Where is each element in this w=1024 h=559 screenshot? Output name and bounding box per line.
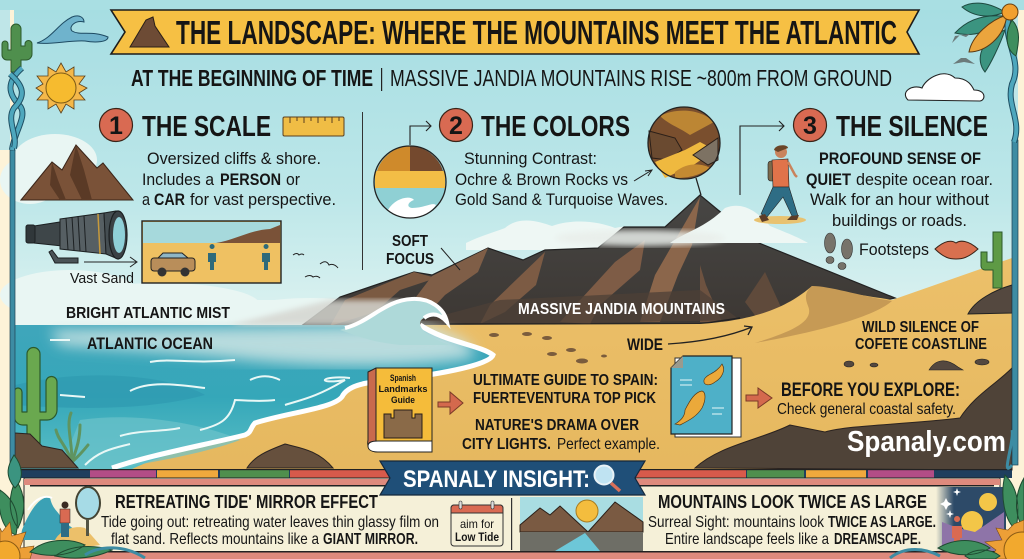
label: soft focus: SOFT: [392, 233, 428, 250]
mountains look twice text: [648, 492, 936, 548]
body text: PROFOUND SENSE OF: [819, 149, 981, 168]
icon: mountain: [21, 145, 133, 200]
connector arrow: [410, 121, 431, 145]
mountains look twice text: MOUNTAINS LOOK TWICE AS LARGE: [658, 492, 927, 512]
retreating tide text: RETREATING TIDE' MIRROR EFFECT: [115, 492, 378, 512]
heading: THE SCALE: [142, 111, 271, 143]
icon: guide book: Guide: [391, 395, 415, 406]
text: ultimate guide: CITY LIGHTS.: [462, 436, 551, 453]
label: massive jandia mountains: MASSIVE JANDIA MOUNTAINS: [518, 301, 725, 318]
arrow: book to guide: [438, 392, 463, 414]
body text: [142, 149, 336, 209]
icon: volcano: [130, 17, 169, 47]
icon: map of Fuerteventura: [671, 356, 741, 437]
rocks right: [968, 285, 1012, 314]
icon: wave, person and mirror: [20, 487, 100, 548]
birds: [293, 254, 338, 278]
mirror mountains picture: [520, 497, 643, 551]
body text: Stunning Contrast:: [464, 149, 597, 168]
text: ultimate guide: FUERTEVENTURA TOP PICK: [473, 390, 656, 407]
text: ultimate guide: [462, 372, 660, 453]
rock left: [15, 433, 78, 468]
plant: [56, 413, 88, 462]
footprints on sand: [489, 332, 607, 364]
mountains look twice text: DREAMSCAPE.: [834, 531, 921, 548]
colour swatch circle: [374, 146, 446, 218]
icon: guide book: Landmarks: [378, 384, 428, 395]
body text: Ochre & Brown Rocks vs: [455, 170, 628, 189]
mountains look twice text: Entire landscape feels like a: [665, 531, 829, 548]
icon: magnifier: [594, 466, 620, 491]
icon: bats right: [952, 34, 975, 64]
sky: [14, 0, 1012, 330]
icon: telephoto lens: [26, 211, 137, 267]
cactus right: [981, 232, 1002, 288]
text: before you explore: [777, 380, 960, 418]
label: wild silence of cofete coastline: [855, 319, 987, 353]
ocean: [15, 325, 493, 470]
arrow: map to explore: [746, 388, 772, 408]
icon: leaves top right: [955, 3, 1018, 142]
icon: guide book: [368, 368, 432, 452]
body text: Oversized cliffs & shore.: [147, 149, 321, 168]
dreamscape picture: [936, 487, 1006, 551]
mountains look twice text: TWICE AS LARGE.: [828, 514, 936, 531]
icon: calendar low tide: Low Tide: [455, 530, 499, 544]
mountains: Massive Jandia: [300, 195, 895, 327]
dune: [755, 286, 892, 343]
body text: for vast perspective.: [190, 190, 336, 209]
icon: guide book: Spanish: [390, 373, 416, 384]
label: wide with arrow: WIDE: [627, 335, 663, 354]
label: wide with arrow: [627, 326, 752, 354]
label: footsteps: Footsteps: [859, 240, 929, 259]
icon: calendar low tide: aim for: [460, 517, 494, 531]
bottom panel: [0, 478, 1024, 559]
rock texture circle: [648, 107, 720, 195]
colour strip: [12, 469, 1012, 478]
retreating tide text: flat sand. Reflects mountains like a: [111, 531, 319, 548]
title banner: [111, 10, 919, 54]
sea mist: [50, 325, 474, 365]
icon: calendar low tide: [451, 501, 503, 546]
label: vast sand: Vast Sand: [70, 270, 134, 287]
brand: Spanaly.com: Spanaly.com: [847, 426, 1006, 458]
body text: a: [142, 190, 150, 209]
number badge 1: [100, 108, 132, 142]
text: ultimate guide: ULTIMATE GUIDE TO SPAIN:: [473, 372, 658, 389]
small arrow: [634, 170, 652, 181]
number badge 1: 1: [109, 112, 123, 140]
icon: cloud: [905, 74, 984, 101]
small stones: [844, 359, 989, 370]
retreating tide text: Tide going out: retreating water leaves thin glassy film on: [101, 514, 439, 531]
label: soft focus: FOCUS: [386, 251, 434, 268]
text: before you explore: BEFORE YOU EXPLORE:: [781, 380, 960, 401]
body text: or: [286, 170, 300, 189]
subtitle: MASSIVE JANDIA MOUNTAINS RISE ~800m FROM GROUND: [390, 65, 892, 91]
icon: cactus and vine left: [2, 24, 32, 150]
subtitle: AT THE BEGINNING OF TIME: [131, 65, 373, 91]
foam lines: [50, 340, 350, 465]
text: ultimate guide: Perfect example.: [557, 436, 660, 453]
label: atlantic ocean: ATLANTIC OCEAN: [87, 334, 213, 353]
icon: footprints: [824, 233, 852, 270]
corner foliage bottom right: [890, 430, 1024, 559]
body text: PERSON: [220, 170, 281, 189]
sand ground: [15, 258, 1012, 470]
cactus scene: [14, 348, 57, 445]
mist cloud around the peak: [555, 206, 808, 246]
shoreline foam: [112, 325, 493, 468]
banner: spanaly insight: SPANALY INSIGHT:: [403, 466, 590, 493]
mountains look twice text: Surreal Sight: mountains look: [648, 514, 825, 531]
heading: THE SILENCE: [836, 111, 988, 143]
body text: QUIET: [806, 170, 852, 189]
banner: spanaly insight: [380, 461, 645, 495]
panel: the silence: [740, 108, 993, 270]
body text: CAR: [154, 190, 185, 209]
icon: ruler: [283, 117, 344, 136]
rocks bottom right: [695, 368, 1012, 470]
number badge 2: [440, 108, 472, 142]
body text: Includes a: [142, 170, 215, 189]
panel: the scale: [21, 108, 344, 287]
divider: [362, 112, 363, 270]
rock centre: [247, 444, 333, 468]
number badge 3: [794, 108, 826, 142]
subtitle: [131, 65, 892, 91]
body text: [806, 149, 993, 230]
breaking wave: [340, 298, 450, 345]
icon: sun: [36, 63, 87, 113]
body text: [455, 149, 668, 209]
body text: despite ocean roar.: [856, 170, 993, 189]
label: soft focus: [386, 233, 460, 270]
ocean shading: [15, 375, 240, 470]
corner foliage bottom left: [0, 455, 145, 559]
mist over left mountain foot: [230, 300, 420, 325]
connector arrow: [740, 121, 784, 195]
body text: Gold Sand & Turquoise Waves.: [455, 190, 668, 209]
icon: lips: [935, 241, 978, 259]
body text: Walk for an hour without: [810, 190, 989, 209]
retreating tide text: [101, 492, 439, 548]
label: wild silence of cofete coastline: WILD SILENCE OF: [862, 319, 979, 336]
number badge 2: 2: [449, 112, 463, 140]
text: before you explore: Check general coastal safety.: [777, 401, 956, 418]
icon: hiker: [754, 145, 806, 224]
body text: buildings or roads.: [832, 211, 967, 230]
panel: the colors: [374, 107, 720, 218]
label: wild silence of cofete coastline: COFETE COASTLINE: [855, 336, 987, 353]
text: ultimate guide: NATURE'S DRAMA OVER: [475, 417, 639, 434]
photo frame with car and people: [142, 221, 281, 283]
back cloud behind the mountains: [466, 220, 700, 250]
icon: wave top left: [37, 16, 108, 43]
frame left and right: [10, 140, 1018, 472]
heading: THE COLORS: [481, 111, 630, 143]
retreating tide text: GIANT MIRROR.: [323, 531, 418, 548]
sky clouds left: [0, 134, 380, 327]
label: bright atlantic mist: BRIGHT ATLANTIC MIST: [66, 305, 230, 322]
number badge 3: 3: [803, 112, 817, 140]
